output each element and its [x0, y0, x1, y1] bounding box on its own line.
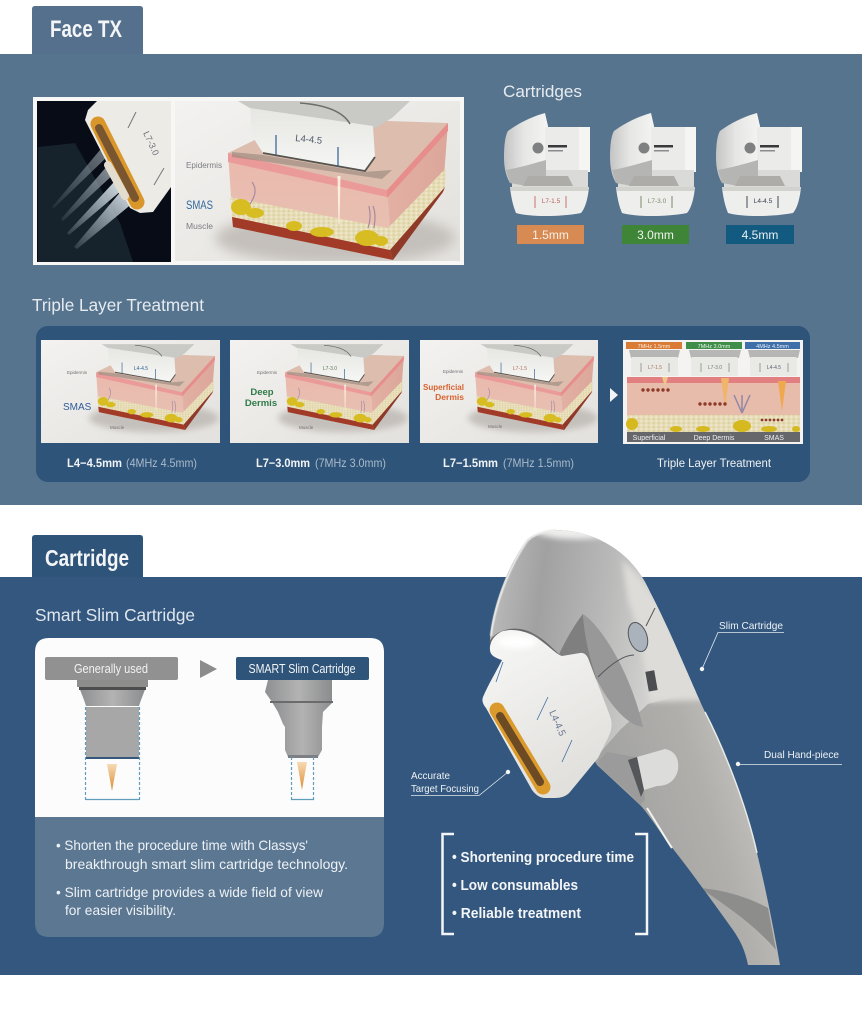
callout: Slim Cartridge	[700, 620, 784, 671]
panel: triple layer treatment	[36, 326, 810, 482]
heading: Cartridges: Cartridges	[503, 82, 582, 101]
triple layer diagram	[623, 340, 803, 444]
callout: Accurate Target Focusing: Target Focusing	[411, 783, 479, 795]
cartridge 3.0mm: 3.0mm	[637, 228, 674, 242]
cartridge 4.5mm	[716, 113, 802, 244]
photo: ultrasound beams	[37, 101, 171, 262]
generic cartridge drawing	[77, 680, 148, 800]
step photo: SMAS: Epidermis	[67, 370, 88, 375]
triple layer diagram: 7MHz 3.0mm	[698, 344, 731, 350]
triple layer diagram: 7MHz 1.5mm	[638, 344, 671, 350]
section background: Cartridge	[0, 577, 862, 975]
step photo: Superficial Dermis: Muscle	[488, 424, 503, 429]
dark wedge	[558, 614, 598, 680]
cartridge shell	[482, 630, 612, 798]
lower button base	[597, 752, 645, 805]
step photo: SMAS: L4-4.5	[134, 366, 148, 372]
panel: slim cartridge benefits	[35, 817, 384, 937]
label: Muscle: Muscle	[186, 221, 213, 231]
bracketed feature list	[442, 834, 647, 934]
heading: Triple Layer Treatment: Triple Layer Treatment	[32, 295, 204, 315]
step photo: Superficial Dermis: Epidermis	[443, 369, 464, 374]
orange window	[497, 710, 543, 787]
callout: Accurate Target Focusing: Accurate	[411, 770, 450, 782]
step photo: SMAS	[41, 340, 220, 470]
cartridge 1.5mm: 1.5mm	[532, 228, 569, 242]
grip button	[637, 749, 678, 790]
callout: Dual Hand-piece	[736, 749, 842, 766]
callout: Slim Cartridge: Slim Cartridge	[719, 620, 783, 632]
panel: slim cartridge benefits: • Shorten the procedure time with Classys'	[56, 837, 308, 853]
step photo: Deep Dermis: L7−3.0mm	[256, 456, 310, 470]
bracketed feature list: • Shortening procedure time	[452, 849, 634, 866]
step photo: Superficial Dermis: L7-1.5	[513, 366, 527, 372]
step photo: Deep Dermis: L7-3.0	[323, 366, 337, 372]
triple layer diagram: L7-1.5	[648, 365, 662, 371]
step photo: Superficial Dermis: (7MHz 1.5mm)	[503, 456, 574, 470]
label: SMAS: SMAS	[186, 200, 213, 212]
handpiece illustration: L4-4.5	[546, 709, 567, 738]
cartridge 1.5mm	[504, 113, 590, 244]
triple layer diagram: Superficial	[633, 435, 666, 442]
photo: ultrasound beams: L7-3.0	[141, 130, 161, 157]
handpiece illustration	[480, 520, 790, 970]
step photo: Superficial Dermis	[420, 340, 598, 470]
callout: Dual Hand-piece: Dual Hand-piece	[764, 749, 839, 761]
panel: slim cartridge benefits: breakthrough smart slim cartridge technology.	[65, 856, 348, 872]
caption: Triple Layer Treatment: Triple Layer Treatment	[657, 456, 772, 470]
bracketed feature list: • Low consumables	[452, 877, 578, 894]
handle body	[480, 520, 790, 970]
step photo: Superficial Dermis: Superficial	[423, 382, 464, 392]
step photo: SMAS: L4−4.5mm	[67, 456, 122, 470]
cartridge 4.5mm: L4-4.5	[754, 198, 773, 205]
step photo: Superficial Dermis: L7−1.5mm	[443, 456, 498, 470]
triple layer diagram: 4MHz 4.5mm	[756, 344, 789, 350]
tab: Cartridge	[32, 535, 143, 577]
label: Generally used: Generally used	[74, 662, 148, 676]
step photo: Deep Dermis: Dermis	[245, 398, 277, 409]
cartridge 4.5mm: 4.5mm	[742, 228, 778, 242]
step photo: Superficial Dermis: Dermis	[435, 392, 464, 402]
triple layer diagram: Deep Dermis	[694, 435, 735, 442]
step photo: Deep Dermis: Deep	[250, 387, 274, 398]
label: SMART Slim Cartridge: SMART Slim Cartridge	[248, 662, 356, 676]
tab: Face TX: Face TX	[50, 16, 122, 43]
slim cartridge drawing	[265, 680, 333, 800]
dome rim	[491, 530, 556, 636]
photo: skin block with labels	[175, 101, 460, 261]
tab: Face TX	[32, 6, 143, 54]
step photo: Deep Dermis: Epidermis	[257, 370, 278, 375]
arrow	[610, 388, 618, 402]
panel: slim cartridge benefits: • Slim cartridge provides a wide field of view	[56, 884, 324, 900]
triple layer diagram: SMAS	[764, 435, 784, 442]
tab: Cartridge: Cartridge	[45, 545, 129, 571]
cartridge 1.5mm: L7-1.5	[542, 198, 561, 205]
cartridge 3.0mm	[610, 113, 696, 244]
arrow	[200, 660, 217, 678]
triple layer diagram: L7-3.0	[708, 365, 722, 371]
heading: Smart Slim Cartridge: Smart Slim Cartridge	[35, 605, 195, 625]
triple layer diagram: L4-4.5	[767, 365, 781, 371]
section background: Face TX	[0, 54, 862, 505]
saddle recess	[583, 614, 643, 727]
dark band under dome	[489, 629, 563, 658]
right highlight	[705, 712, 757, 853]
panel: slim cartridge comparison	[35, 638, 384, 817]
bracketed feature list: • Reliable treatment	[452, 905, 581, 922]
photo: skin block with labels: L4-4.5	[295, 133, 323, 147]
step photo: SMAS: Muscle	[110, 425, 125, 430]
photo panel: cartridge and skin block	[33, 97, 464, 265]
step photo: Deep Dermis: (7MHz 3.0mm)	[315, 456, 386, 470]
button oval	[625, 620, 651, 654]
label: Generally used	[45, 657, 178, 680]
callout: Accurate Target Focusing	[411, 770, 510, 796]
cartridge 3.0mm: L7-3.0	[648, 198, 667, 205]
step photo: Deep Dermis	[230, 340, 409, 470]
step photo: SMAS: SMAS	[63, 402, 92, 413]
step photo: SMAS: (4MHz 4.5mm)	[126, 456, 197, 470]
step photo: Deep Dermis: Muscle	[299, 425, 314, 430]
panel: slim cartridge benefits: for easier visibility.	[65, 902, 176, 918]
label: SMART Slim Cartridge	[236, 657, 369, 680]
label: Epidermis: Epidermis	[186, 160, 222, 170]
slot	[645, 670, 658, 692]
